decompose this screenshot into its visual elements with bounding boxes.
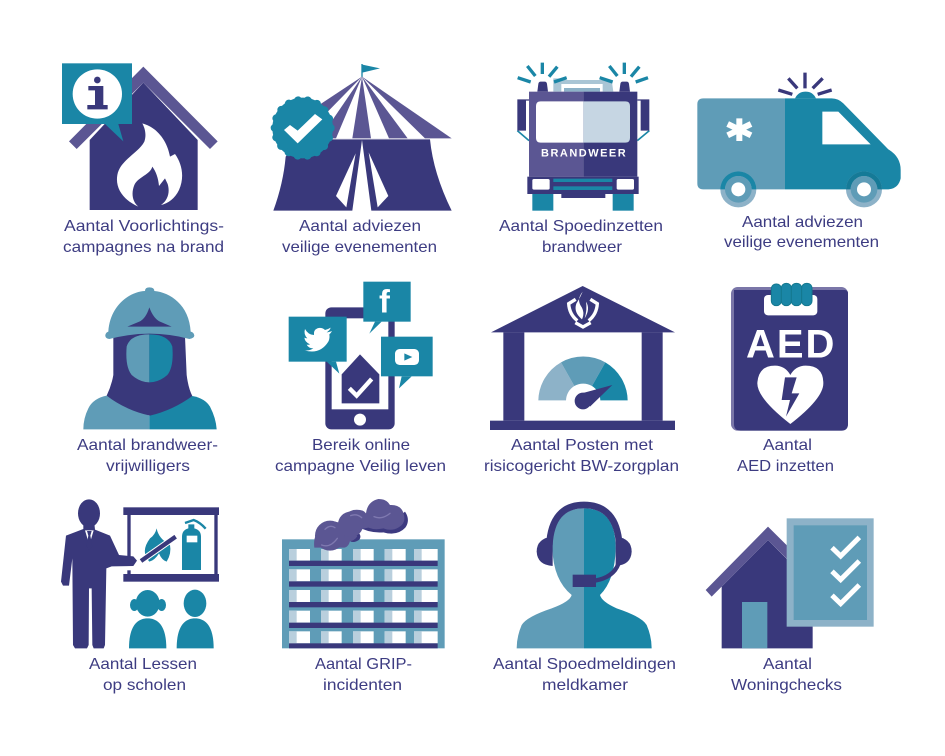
label: Aantal <box>763 437 812 454</box>
label: Aantal Voorlichtings- <box>64 218 224 235</box>
icon: fire truck <box>517 63 649 211</box>
panel: AED inzetten <box>731 283 848 475</box>
label <box>89 656 197 694</box>
label: Aantal adviezen <box>299 218 421 235</box>
panel: lessen op scholen <box>61 499 219 694</box>
panel: adviezen veilige evenementen (ambulance) <box>697 73 901 251</box>
label: Aantal Posten met <box>511 437 654 454</box>
label <box>484 437 679 475</box>
icon: AED card <box>731 283 848 431</box>
label <box>724 214 879 251</box>
label: veilige evenementen <box>282 239 437 256</box>
panel: posten met risicogericht zorgplan <box>484 286 679 475</box>
label: veilige evenementen <box>724 234 879 251</box>
label: Aantal Lessen <box>89 656 197 673</box>
icon: phone with social bubbles <box>289 282 433 429</box>
icon: house with checklist <box>706 518 874 648</box>
label: vrijwilligers <box>106 458 190 475</box>
label: meldkamer <box>542 677 629 694</box>
icon: phone with social bubbles: f <box>379 283 390 320</box>
panel: woningchecks <box>706 518 874 694</box>
label: AED inzetten <box>737 458 834 475</box>
label: Aantal GRIP- <box>315 656 412 673</box>
label <box>63 218 224 256</box>
label: Aantal adviezen <box>742 214 863 231</box>
label <box>282 218 437 256</box>
panel: spoedmeldingen meldkamer <box>493 505 676 694</box>
icon: building with smoke <box>282 499 445 648</box>
label <box>77 437 218 475</box>
label: Aantal brandweer- <box>77 437 218 454</box>
label <box>731 656 842 694</box>
label <box>737 437 834 475</box>
panel: brandweervrijwilligers <box>77 287 218 475</box>
panel: bereik online campagne <box>275 282 446 475</box>
icon: fire truck: BRANDWEER <box>541 148 626 160</box>
label: Woningchecks <box>731 677 842 694</box>
label: Aantal Spoedinzetten <box>499 218 663 235</box>
panel: adviezen veilige evenementen (tent) <box>272 64 452 256</box>
panel: GRIP-incidenten <box>282 499 445 694</box>
icon: house with flame and info bubble <box>62 63 218 210</box>
icon: ambulance <box>697 73 901 207</box>
label: risicogericht BW-zorgplan <box>484 458 679 475</box>
icon: AED card: AED <box>746 322 834 366</box>
label: Bereik online <box>312 437 410 454</box>
label: Aantal Spoedmeldingen <box>493 656 676 673</box>
icon: fire station with gauge <box>490 286 675 430</box>
label: brandweer <box>542 239 623 256</box>
label: op scholen <box>103 677 186 694</box>
icon: firefighter bust <box>83 287 217 429</box>
label <box>499 218 663 256</box>
label: Aantal <box>763 656 812 673</box>
label <box>315 656 412 694</box>
icon: teacher with board and pupils <box>61 499 219 648</box>
label <box>493 656 676 694</box>
label: campagne Veilig leven <box>275 458 446 475</box>
label <box>275 437 446 475</box>
label: campagnes na brand <box>63 239 224 256</box>
icon: operator with headset <box>517 505 652 648</box>
label: incidenten <box>323 677 402 694</box>
panel: voorlichtingscampagnes <box>62 63 224 256</box>
panel: spoedinzetten brandweer <box>499 63 663 256</box>
icon: circus tent with check badge <box>272 64 452 211</box>
